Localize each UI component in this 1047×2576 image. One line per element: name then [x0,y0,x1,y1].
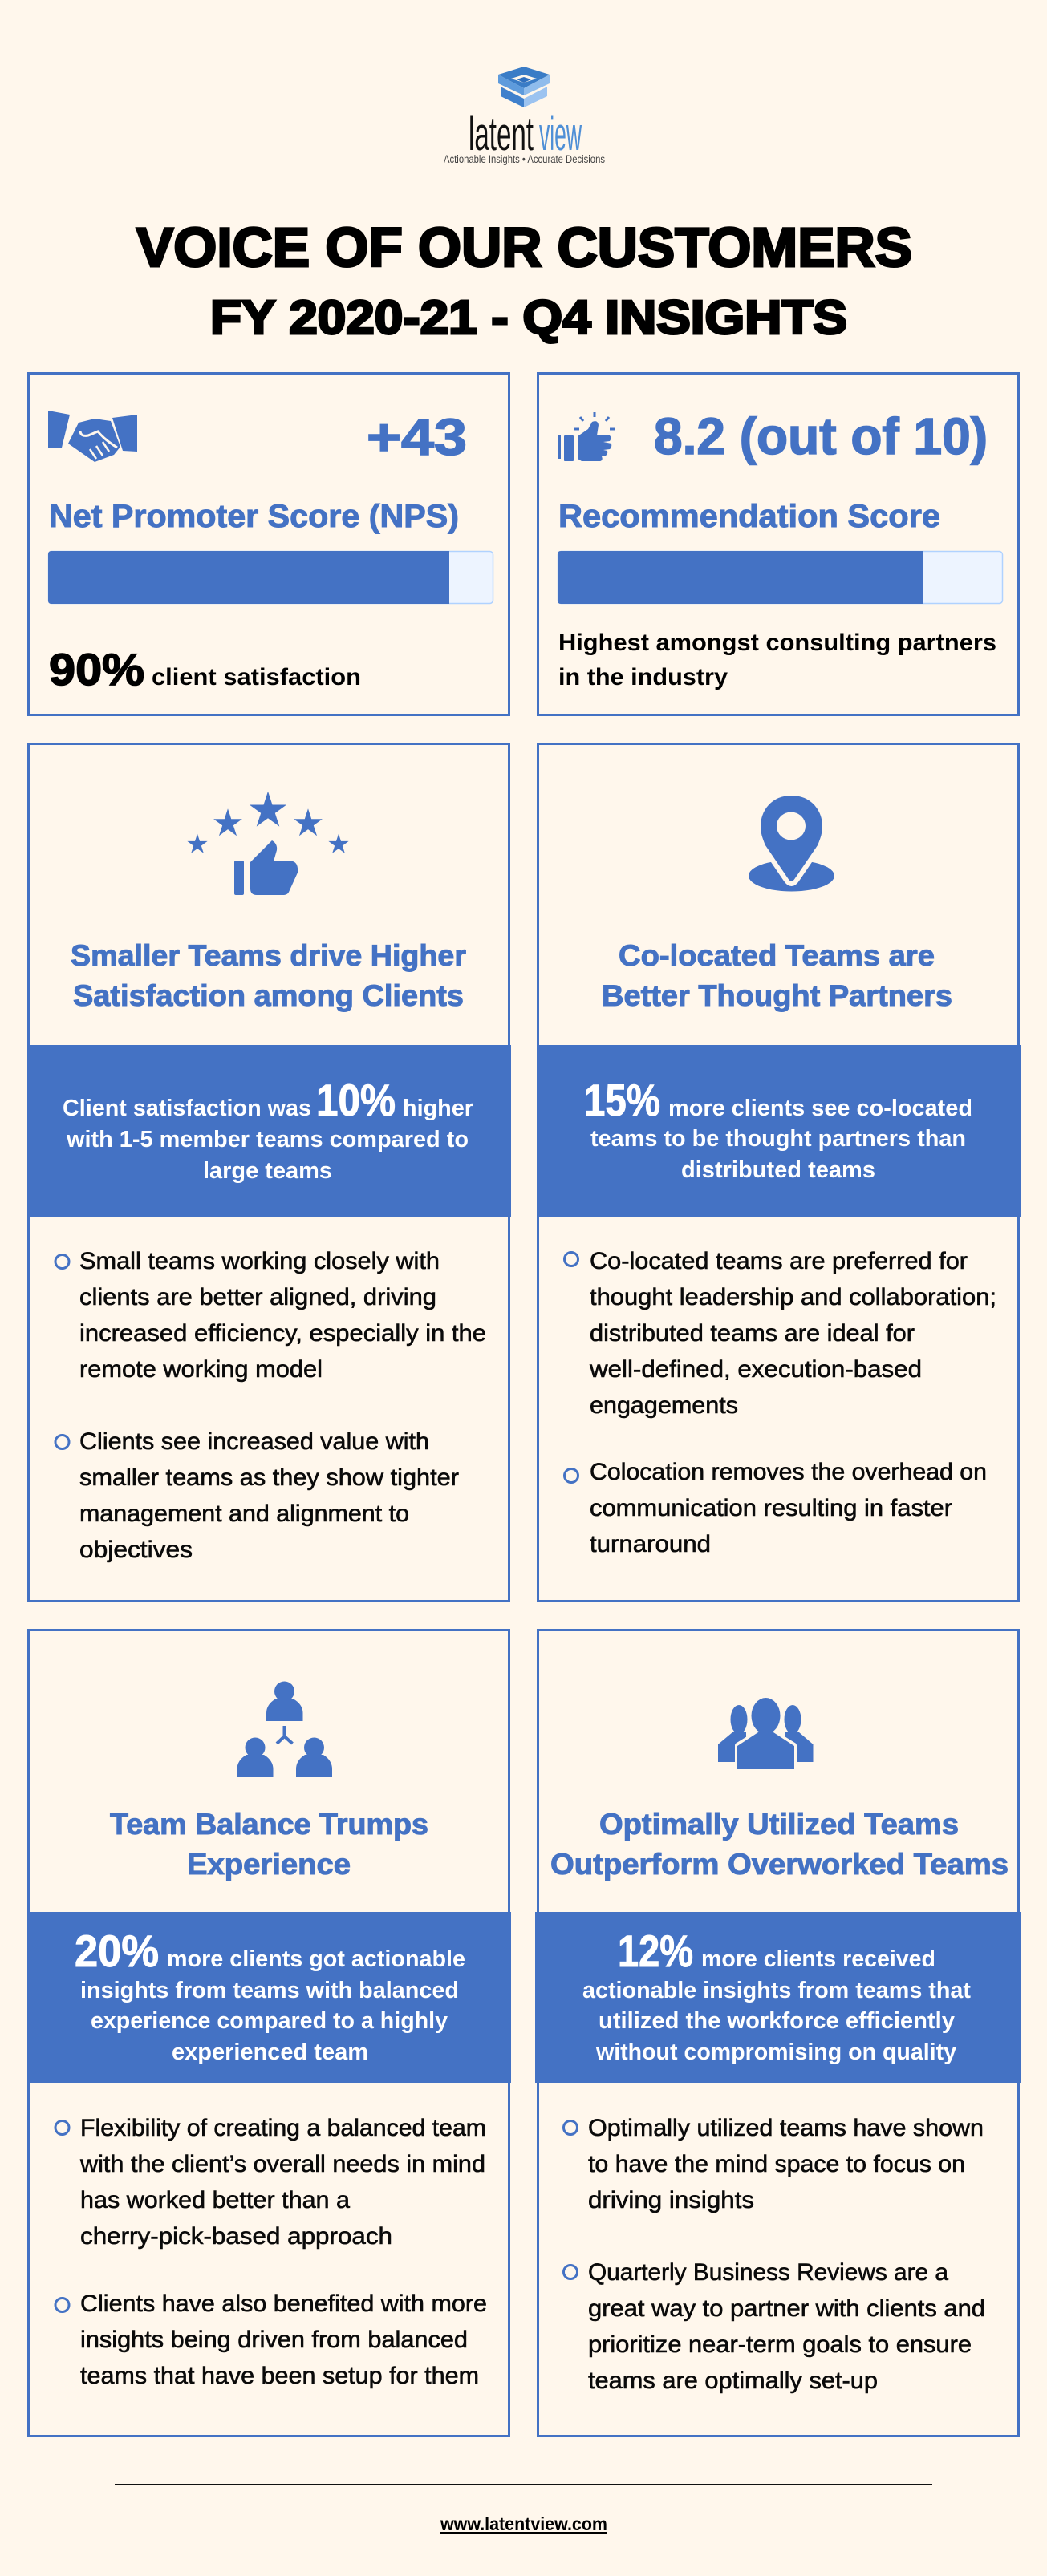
callout: 12% more clients: 12% [618,1926,693,1976]
bullet list: co-located teams: communication resulting in faster [590,1495,952,1521]
bullet list: co-located teams: turnaround [590,1531,711,1557]
footer link: www.latentview.com [440,2513,607,2534]
heading: smaller teams: Satisfaction among Clients [73,979,464,1012]
bullet list: optimally utilized teams: Optimally utilized teams have shown [588,2115,984,2141]
bullet list: smaller teams: clients are better aligned, driving [79,1284,436,1310]
heading: smaller teams: Smaller Teams drive Higher [71,939,466,972]
bullet list: team balance [55,2115,487,2389]
logo: LatentView: Actionable Insights • Accurate Decisions [444,152,605,165]
callout: 12% more clients: utilized the workforce efficiently [599,2008,955,2034]
client satisfaction stat: client satisfaction [152,664,361,691]
callout: 15% more clients: 15% [584,1075,660,1125]
callout: 20% more clients: experienced team [172,2039,368,2065]
heading: smaller teams [71,939,466,1012]
recommendation heading: Recommendation Score [558,499,940,534]
bullet list: optimally utilized teams: teams are optimally set-up [588,2367,878,2394]
bullet list: smaller teams: objectives [79,1537,193,1563]
heading: co-located teams [602,939,952,1012]
logo: LatentView: view [539,108,582,160]
heading: optimally utilized teams: Optimally Utilized Teams [599,1808,959,1841]
callout: 12% more clients: more clients received [701,1946,935,1972]
bullet list: co-located teams: thought leadership and collaboration; [590,1284,996,1310]
bullet list: smaller teams: Clients see increased value with [79,1428,429,1455]
bullet list: smaller teams: Small teams working closely with [79,1248,440,1274]
bullet list: optimally utilized teams: great way to partner with clients and [588,2295,985,2322]
bullet list: optimally utilized teams [563,2115,985,2394]
bullet list: team balance: Flexibility of creating a balanced team [80,2115,486,2141]
logo: LatentView [444,67,605,165]
callout: 12% more clients: actionable insights from teams that [582,1978,971,2003]
bullet list: team balance: teams that have been setup for them [80,2363,479,2389]
NPS progress bar [48,551,493,604]
callout: 20% more clients: 20% [75,1926,159,1976]
recommendation note [558,630,996,691]
callout: 20% more clients: more clients got actionable [167,1946,465,1972]
callout: 10% higher [27,1045,511,1217]
bullet list: team balance: cherry-pick-based approach [80,2223,392,2250]
bullet list: team balance: Clients have also benefited with more [80,2290,487,2317]
heading: optimally utilized teams: Outperform Overworked Teams [550,1848,1008,1881]
heading: co-located teams: Better Thought Partners [602,979,952,1012]
recommendation note: in the industry [558,664,728,691]
callout: 12% more clients [535,1912,1021,2083]
bullet list: optimally utilized teams: Quarterly Business Reviews are a [588,2259,948,2286]
panel: optimally utilized teams [535,1630,1021,2436]
client satisfaction stat [49,644,361,695]
title: VOICE OF OUR CUSTOMERS [136,217,912,278]
recommendation note: Highest amongst consulting partners [558,630,996,656]
bullet list: smaller teams [55,1248,486,1563]
icon: location pin [749,793,834,892]
heading: team balance: Experience [187,1848,351,1881]
bullet list: smaller teams: management and alignment to [79,1501,409,1527]
bullet list: optimally utilized teams: to have the mind space to focus on [588,2151,965,2177]
callout: 10% higher: with 1-5 member teams compared to [66,1127,469,1152]
bullet list: smaller teams: remote working model [79,1356,323,1383]
callout: 10% higher: higher [403,1096,473,1121]
panel: co-located teams [537,744,1021,1601]
callout: 15% more clients: more clients see co-located [668,1096,972,1121]
callout: 15% more clients [537,1045,1021,1217]
heading: co-located teams: Co-located Teams are [619,939,935,972]
panel: team balance [27,1630,511,2436]
bullet list: co-located teams [565,1248,996,1557]
heading: team balance [110,1808,428,1881]
bullet list: team balance: insights being driven from balanced [80,2327,468,2353]
bullet list: co-located teams: engagements [590,1392,738,1419]
recommendation value: 8.2 (out of 10) [654,407,988,465]
callout: 10% higher: large teams [203,1158,332,1184]
callout: 20% more clients: experience compared to a highly [91,2008,448,2034]
callout: 15% more clients: teams to be thought partners than [590,1126,966,1152]
bullet list: co-located teams: Co-located teams are preferred for [590,1248,968,1274]
heading: team balance: Team Balance Trumps [110,1808,428,1841]
bullet list: smaller teams: smaller teams as they show tighter [79,1464,459,1491]
client satisfaction stat: 90% [49,644,144,695]
bullet list: optimally utilized teams: prioritize near-term goals to ensure [588,2331,972,2358]
icon: thumbs up [558,412,615,461]
bullet list: co-located teams: Colocation removes the overhead on [590,1459,987,1485]
recommendation progress bar [558,551,1003,604]
callout: 10% higher: 10% [316,1075,396,1125]
bullet list: co-located teams: distributed teams are ideal for [590,1320,915,1347]
callout: 15% more clients: distributed teams [681,1157,875,1183]
title: FY 2020-21 - Q4 INSIGHTS [210,291,847,344]
icon: stars and thumbs up [187,792,349,895]
NPS heading: Net Promoter Score (NPS) [49,499,459,534]
title [136,217,912,344]
icon: three people [237,1681,332,1777]
bullet list: smaller teams: increased efficiency, especially in the [79,1320,486,1347]
bullet list: optimally utilized teams: driving insights [588,2187,754,2213]
heading: optimally utilized teams [550,1808,1008,1881]
icon: handshake [48,411,137,462]
logo: LatentView: latent [469,108,534,160]
callout: 10% higher: Client satisfaction was [63,1096,311,1121]
panel: Net Promoter Score [29,374,509,715]
bullet list: co-located teams: well-defined, execution-based [589,1356,922,1383]
bullet list: team balance: with the client’s overall needs in mind [79,2151,485,2177]
callout: 20% more clients: insights from teams with balanced [80,1978,459,2003]
callout: 20% more clients [27,1912,511,2083]
NPS value: +43 [367,408,467,466]
icon: group of people [718,1698,814,1769]
panel: Recommendation Score [538,374,1019,715]
bullet list: team balance: has worked better than a [80,2187,350,2213]
panel: smaller teams [27,744,511,1601]
callout: 12% more clients: without compromising on quality [595,2039,956,2065]
